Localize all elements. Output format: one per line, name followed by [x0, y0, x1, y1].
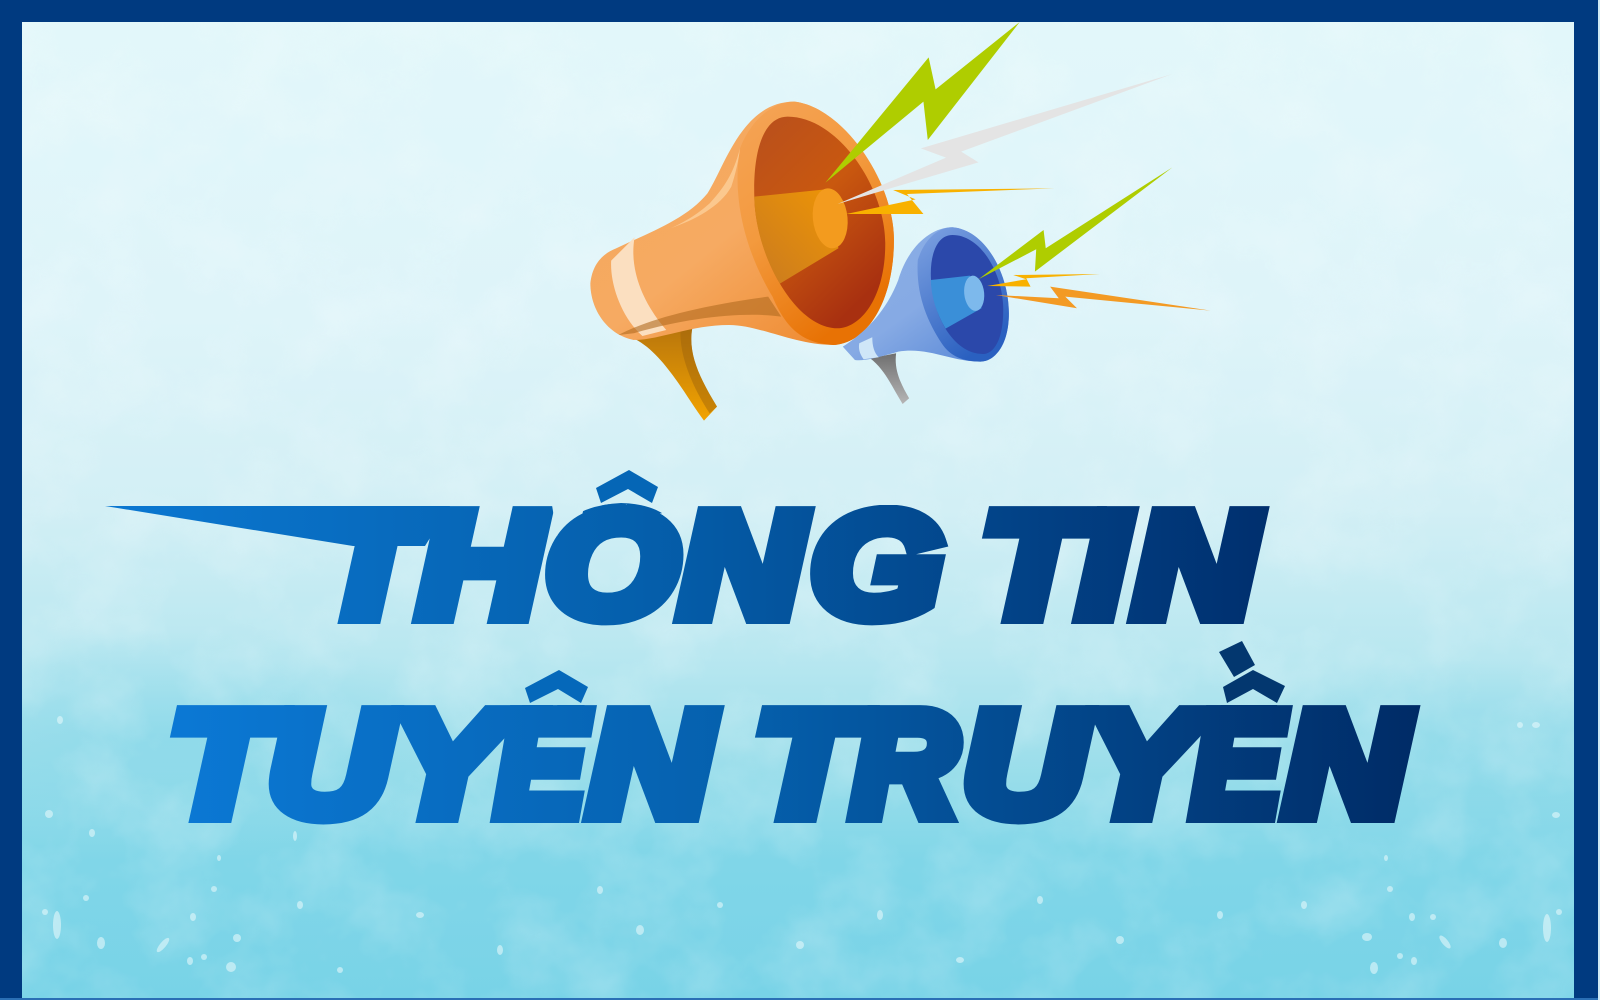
- title swoosh: [105, 506, 450, 546]
- icon: small blue megaphone: [843, 227, 1009, 404]
- title line 2: [170, 705, 1420, 824]
- white paint speckles: [42, 716, 1562, 974]
- title line 2: Ề: [1192, 681, 1284, 847]
- title line 2: Ê: [496, 681, 588, 847]
- icon: grey lightning bolt: [838, 74, 1172, 204]
- title line 2: N T: [589, 681, 870, 847]
- title line 2: TUY: [169, 681, 516, 847]
- icon: yellow lightning bolt, small: [987, 274, 1100, 287]
- icon: green lightning bolt, small: [979, 167, 1172, 279]
- title line 2: R: [852, 681, 957, 847]
- icon: orange lightning bolt, small: [996, 287, 1211, 311]
- icon: green lightning bolt, large: [825, 22, 1020, 183]
- icon: large orange megaphone: [590, 102, 894, 421]
- title line 1: THÔNG TIN: [318, 482, 1259, 648]
- icon: yellow lightning bolt, large: [846, 188, 1054, 214]
- accent: circumflex on E: [525, 670, 588, 703]
- illustration: two megaphones with lightning bolts: [590, 22, 1211, 421]
- accent: circumflex on O: [596, 470, 658, 503]
- accent: circumflex and grave on second E: [1219, 641, 1285, 703]
- title: [105, 470, 1410, 847]
- title line 2: UY: [963, 681, 1211, 847]
- title line 2: N: [1285, 681, 1410, 847]
